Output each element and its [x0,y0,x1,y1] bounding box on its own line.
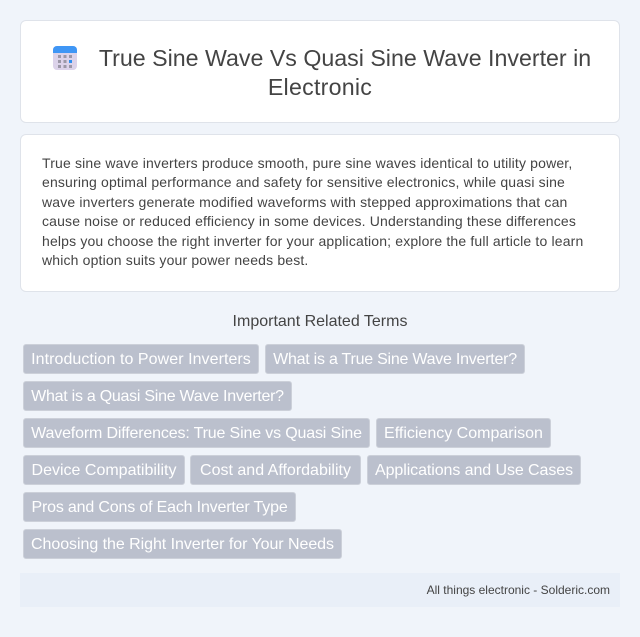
tag [376,418,551,448]
icon: calendar app [53,46,77,70]
tag [23,529,342,559]
title: True Sine Wave Vs Quasi Sine Wave Inverter in [99,45,591,71]
text block: summary: helps you choose the right inverter for your application; explore the full article to learn [42,233,583,249]
tag [23,418,370,448]
footer bar [20,573,620,607]
tag [23,344,259,374]
tag [265,344,525,374]
title [99,45,591,100]
text block: summary: ensuring optimal performance and safety for sensitive electronics, while quasi sine [42,174,565,190]
title: Electronic [268,74,372,100]
panel: title card [20,20,620,123]
tag: Cost and Affordability [200,462,351,479]
tag: Pros and Cons of Each Inverter Type [31,499,288,516]
tag [23,492,296,522]
footer text: All things electronic - Solderic.com [427,583,610,597]
text block: summary: which option suits your power needs best. [42,252,308,268]
text block: summary [42,155,583,268]
tag: What is a True Sine Wave Inverter? [273,351,517,368]
tag: Device Compatibility [32,462,176,479]
tag: Choosing the Right Inverter for Your Needs [31,536,334,553]
tag: Introduction to Power Inverters [31,351,251,368]
heading: important related terms: Important Related Terms [233,313,407,330]
tag [23,381,292,411]
panel: summary card [20,134,620,292]
tag [23,455,185,485]
tag [190,455,361,485]
tag: Waveform Differences: True Sine vs Quasi Sine [31,425,362,442]
text block: summary: cause noise or reduced efficiency in some devices. Understanding these differences [42,213,576,229]
tag: What is a Quasi Sine Wave Inverter? [31,388,284,405]
tag [367,455,581,485]
panel: related term tags [23,344,581,559]
tag: Applications and Use Cases [375,462,573,479]
text block: summary: wave inverters generate modified waveforms with stepped approximations that can [42,194,567,210]
text block: summary: True sine wave inverters produce smooth, pure sine waves identical to utility power, [42,155,572,171]
tag: Efficiency Comparison [384,425,543,442]
